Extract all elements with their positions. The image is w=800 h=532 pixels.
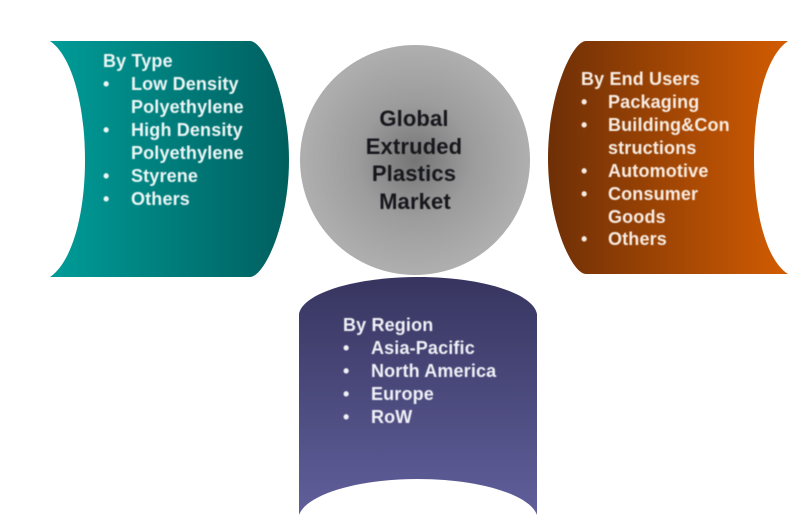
- by type text: Styrene: [131, 166, 198, 186]
- by type text: High Density: [131, 120, 243, 140]
- circle title: Global: [379, 106, 449, 131]
- by region text: [343, 315, 497, 427]
- by type text: •: [103, 74, 109, 94]
- panel: by type: [50, 41, 289, 277]
- by region text: Europe: [371, 384, 434, 404]
- by region text: By Region: [343, 315, 433, 335]
- by end users text: Others: [608, 229, 667, 249]
- by end users text: •: [581, 161, 587, 181]
- by end users text: Consumer: [608, 184, 698, 204]
- by end users text: •: [581, 115, 587, 135]
- by region text: North America: [371, 361, 497, 381]
- by end users text: Packaging: [608, 92, 699, 112]
- central circle: [300, 45, 530, 275]
- by type text: Low Density: [131, 74, 239, 94]
- by end users text: structions: [608, 138, 697, 158]
- by region text: •: [343, 361, 349, 381]
- by type text: •: [103, 166, 109, 186]
- by region text: •: [343, 384, 349, 404]
- by region text: Asia-Pacific: [371, 338, 475, 358]
- by end users text: Automotive: [608, 161, 708, 181]
- by region text: •: [343, 338, 349, 358]
- by type text: Others: [131, 189, 190, 209]
- circle title: [366, 106, 462, 214]
- by end users text: Goods: [608, 207, 666, 227]
- by region text: RoW: [371, 407, 412, 427]
- by region text: •: [343, 407, 349, 427]
- panel: by region: [299, 277, 537, 515]
- by type text: •: [103, 189, 109, 209]
- by type text: By Type: [103, 51, 173, 71]
- panel: by end users: [548, 41, 788, 274]
- by end users text: •: [581, 92, 587, 112]
- by end users text: •: [581, 184, 587, 204]
- by type text: [103, 51, 244, 209]
- circle title: Extruded: [366, 134, 462, 159]
- by type text: Polyethylene: [131, 97, 244, 117]
- by end users text: Building&Con: [608, 115, 730, 135]
- circle title: Plastics: [372, 161, 456, 186]
- by end users text: [581, 69, 730, 249]
- by type text: Polyethylene: [131, 143, 244, 163]
- by end users text: •: [581, 229, 587, 249]
- circle title: Market: [379, 189, 451, 214]
- by type text: •: [103, 120, 109, 140]
- by end users text: By End Users: [581, 69, 700, 89]
